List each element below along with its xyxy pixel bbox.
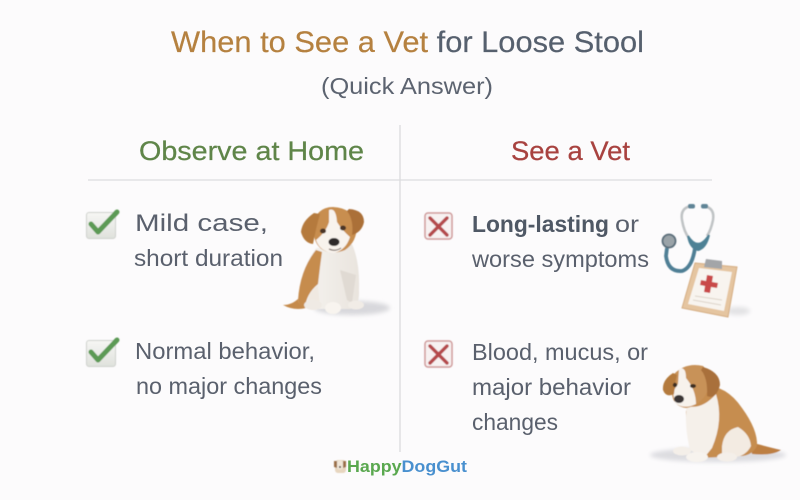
text: blood, mucus: major behavior: [472, 374, 631, 400]
icon: cross blood: [425, 341, 452, 367]
text: long-lasting: worse symptoms: [471, 246, 649, 272]
heading: observe at home: Observe at Home: [139, 136, 364, 166]
subtitle: (Quick Answer): [321, 73, 493, 99]
text: mild case: Mild case,: [135, 210, 268, 237]
text: blood, mucus: Blood, mucus, or: [472, 339, 648, 365]
text: long-lasting: [471, 211, 649, 272]
text: normal behavior: [135, 338, 322, 399]
text: normal behavior: no major changes: [136, 373, 322, 399]
title: When to See a Vet for Loose Stool: [171, 26, 644, 59]
text: long-lasting: or: [615, 211, 639, 237]
text: blood, mucus: [472, 339, 648, 435]
text: mild case: [134, 210, 283, 271]
panel: observe at home: [86, 136, 390, 399]
text: long-lasting: Long-lasting: [472, 211, 609, 237]
text: blood, mucus: changes: [472, 409, 558, 435]
icon: check mild case: [86, 212, 117, 238]
logo: HappyDogGut: [334, 457, 467, 476]
icon: puppy sitting: [283, 207, 390, 315]
column dividers: [88, 125, 712, 452]
icon: logo dog: [334, 460, 346, 473]
icon: sad puppy: [650, 365, 786, 462]
panel: see a vet: [425, 136, 786, 462]
text: mild case: short duration: [134, 245, 283, 271]
text: normal behavior: Normal behavior,: [135, 338, 315, 364]
wordmark: HappyDogGut: [347, 457, 467, 476]
heading: see a vet: See a Vet: [511, 136, 630, 166]
icon: check normal behavior: [86, 340, 117, 366]
icon: cross long-lasting: [425, 213, 452, 239]
icon: stethoscope and clipboard: [662, 204, 750, 317]
